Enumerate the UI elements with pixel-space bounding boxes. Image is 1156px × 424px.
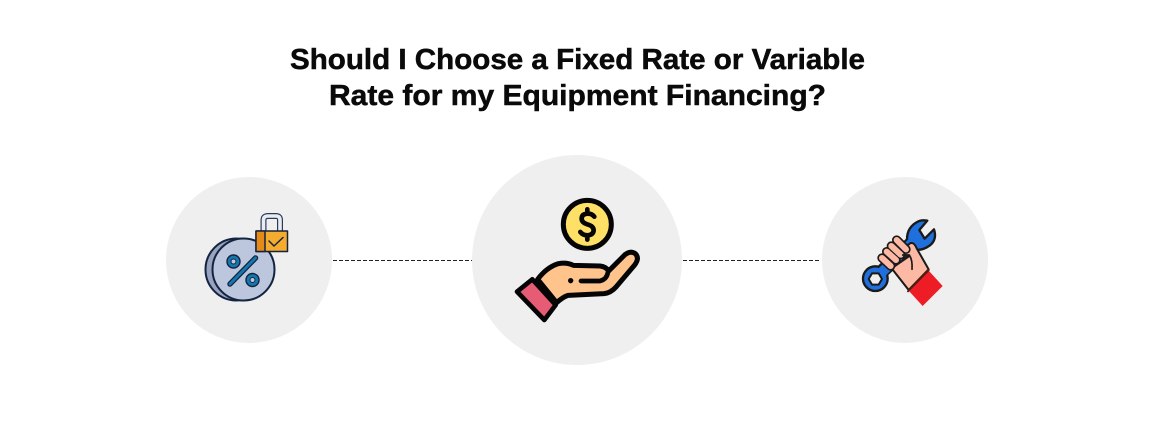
title <box>290 44 865 112</box>
cuff <box>909 271 943 306</box>
panel: left circle <box>166 177 332 343</box>
hand <box>538 252 637 303</box>
icon: hand holding dollar coin <box>517 200 637 320</box>
connector: right dashed line <box>683 260 820 262</box>
title: Rate for my Equipment Financing? <box>329 80 826 112</box>
connector: left dashed line <box>333 260 472 262</box>
panel: center circle <box>472 155 682 365</box>
fingers <box>882 240 906 266</box>
thumb <box>903 255 912 269</box>
coin <box>563 200 611 248</box>
wrench <box>863 220 935 291</box>
icon: percent coin with padlock <box>206 216 288 300</box>
title: Should I Choose a Fixed Rate or Variable <box>290 44 865 76</box>
panel: right circle <box>822 177 988 343</box>
cuff <box>517 279 556 320</box>
icon: hand gripping wrench <box>863 220 943 306</box>
palm <box>892 243 929 290</box>
